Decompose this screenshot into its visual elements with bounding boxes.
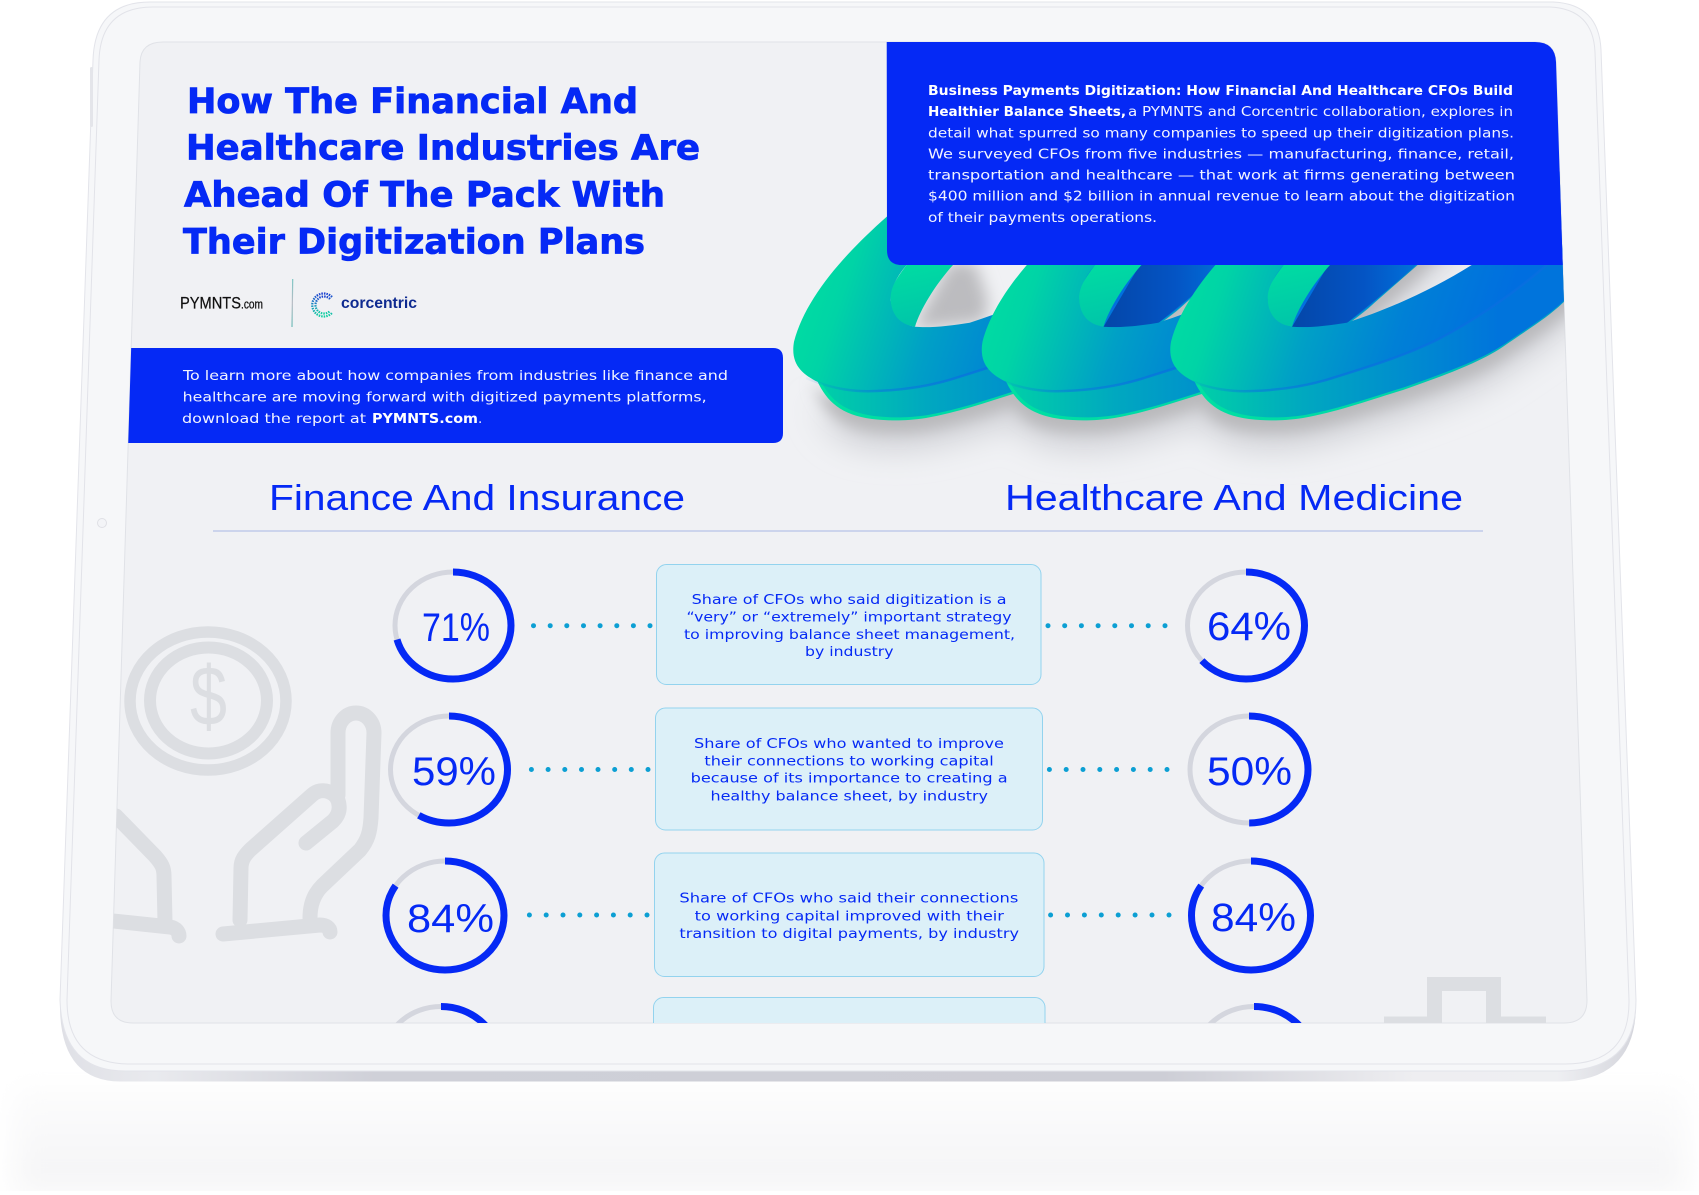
dotted connector: row 3 left (527, 912, 650, 918)
title: Ahead Of The Pack With (184, 176, 665, 216)
box: row 1 description: to improving balance sheet management, (684, 628, 1015, 643)
box: row 1 description (656, 564, 1041, 684)
dotted connector: row 2 left (529, 767, 650, 772)
text: report intro: detail what spurred so many companies to speed up their digitization plans. (928, 125, 1514, 141)
box: row 3 description: Share of CFOs who said their connections (679, 891, 1019, 906)
text: download callout: healthcare are moving forward with digitized payments platforms, (183, 390, 707, 406)
icon: open hands (104, 713, 374, 936)
ground shadow (14, 1084, 1686, 1194)
icon: coin with dollar sign: $ (190, 649, 227, 743)
text: report intro: Healthier Balance Sheets, (928, 104, 1126, 120)
ring: healthcare 84%: 84% (1211, 896, 1296, 940)
title (183, 82, 700, 262)
text: download callout (182, 368, 728, 427)
title: Healthcare Industries Are (186, 128, 700, 168)
ribbon loop 3 (1170, 172, 1564, 420)
logo divider (291, 279, 294, 327)
ring: finance fourth row, cropped (396, 1003, 488, 1023)
ring: finance 84% (386, 861, 504, 970)
logo: PYMNTS.com: .com (241, 297, 263, 311)
box: row 2 description: because of its importance to creating a (691, 772, 1008, 787)
text: download callout: PYMNTS.com (372, 411, 478, 427)
ring: healthcare 64%: 64% (1207, 605, 1291, 649)
title: Their Digitization Plans (183, 222, 645, 262)
ring: healthcare 64% (1188, 572, 1304, 679)
title: How The Financial And (187, 82, 638, 122)
box: row 3 description: transition to digital payments, by industry (679, 927, 1019, 942)
text: report intro: a PYMNTS and Corcentric collaboration, explores in (1128, 104, 1513, 120)
panel: download callout (100, 348, 783, 443)
logo: corcentric: corcentric (341, 295, 417, 312)
text: report intro: We surveyed CFOs from five industries — manufacturing, finance, retail, (928, 146, 1514, 162)
dotted connector: row 1 right (1046, 623, 1168, 628)
ring: healthcare 84% (1192, 861, 1310, 970)
logo: PYMNTS.com: PYMNTS (180, 293, 241, 312)
logo: corcentric (312, 294, 417, 316)
text: download callout: . (478, 411, 482, 427)
dotted connector: row 3 right (1048, 912, 1172, 918)
text: report intro: Business Payments Digitization: How Financial And Healthcare CFOs Build (928, 83, 1513, 99)
box: row 1 description: Share of CFOs who said digitization is a (692, 593, 1007, 608)
ring: finance 59%: 59% (412, 750, 496, 794)
icon: building corner (1384, 977, 1546, 1022)
text: report intro (928, 83, 1515, 226)
text: report intro: of their payments operations. (928, 210, 1157, 226)
camera dot (98, 518, 106, 528)
ring: finance 71% (395, 572, 511, 679)
text: report intro: $400 million and $2 billion in annual revenue to learn about the digitization (928, 189, 1515, 205)
ring: healthcare 50% (1190, 716, 1308, 823)
ring: healthcare fourth row, cropped (1208, 1003, 1302, 1023)
box: row 2 description: healthy balance sheet, by industry (710, 790, 988, 804)
heading: Healthcare And Medicine: Healthcare And Medicine (1005, 477, 1463, 518)
side button (90, 67, 93, 127)
ring: finance 84%: 84% (407, 897, 494, 941)
dotted connector: row 2 right (1047, 767, 1170, 772)
ring: finance 59% (390, 716, 508, 823)
ribbon soft shadows (811, 265, 1564, 459)
box: row 2 description (656, 708, 1042, 830)
box: row 4, cropped (653, 997, 1046, 1023)
text: download callout: To learn more about how companies from industries like finance and (182, 368, 728, 384)
panel: report intro (886, 42, 1563, 265)
box: row 3 description (654, 853, 1044, 976)
ribbon loop 2 (982, 265, 1418, 420)
heading: Finance And Insurance: Finance And Insurance (269, 477, 685, 518)
icon: coin with dollar sign (130, 632, 286, 770)
box: row 3 description: to working capital improved with their (695, 910, 1005, 925)
text: report intro: transportation and healthcare — that work at firms generating between (928, 168, 1515, 184)
ring: healthcare 50%: 50% (1207, 750, 1292, 794)
dotted connector: row 1 left (531, 623, 652, 628)
text: download callout: download the report at (182, 411, 366, 427)
screen panel (111, 42, 1587, 1023)
box: row 2 description: their connections to working capital (704, 754, 994, 769)
ribbon graphic (793, 172, 1564, 459)
box: row 2 description: Share of CFOs who wanted to improve (694, 737, 1004, 752)
box: row 1 description: by industry (805, 645, 894, 660)
box: row 1 description: “very” or “extremely” important strategy (686, 610, 1012, 626)
ring: finance 71%: 71% (422, 606, 490, 650)
ribbon loop 1 (793, 216, 1216, 420)
